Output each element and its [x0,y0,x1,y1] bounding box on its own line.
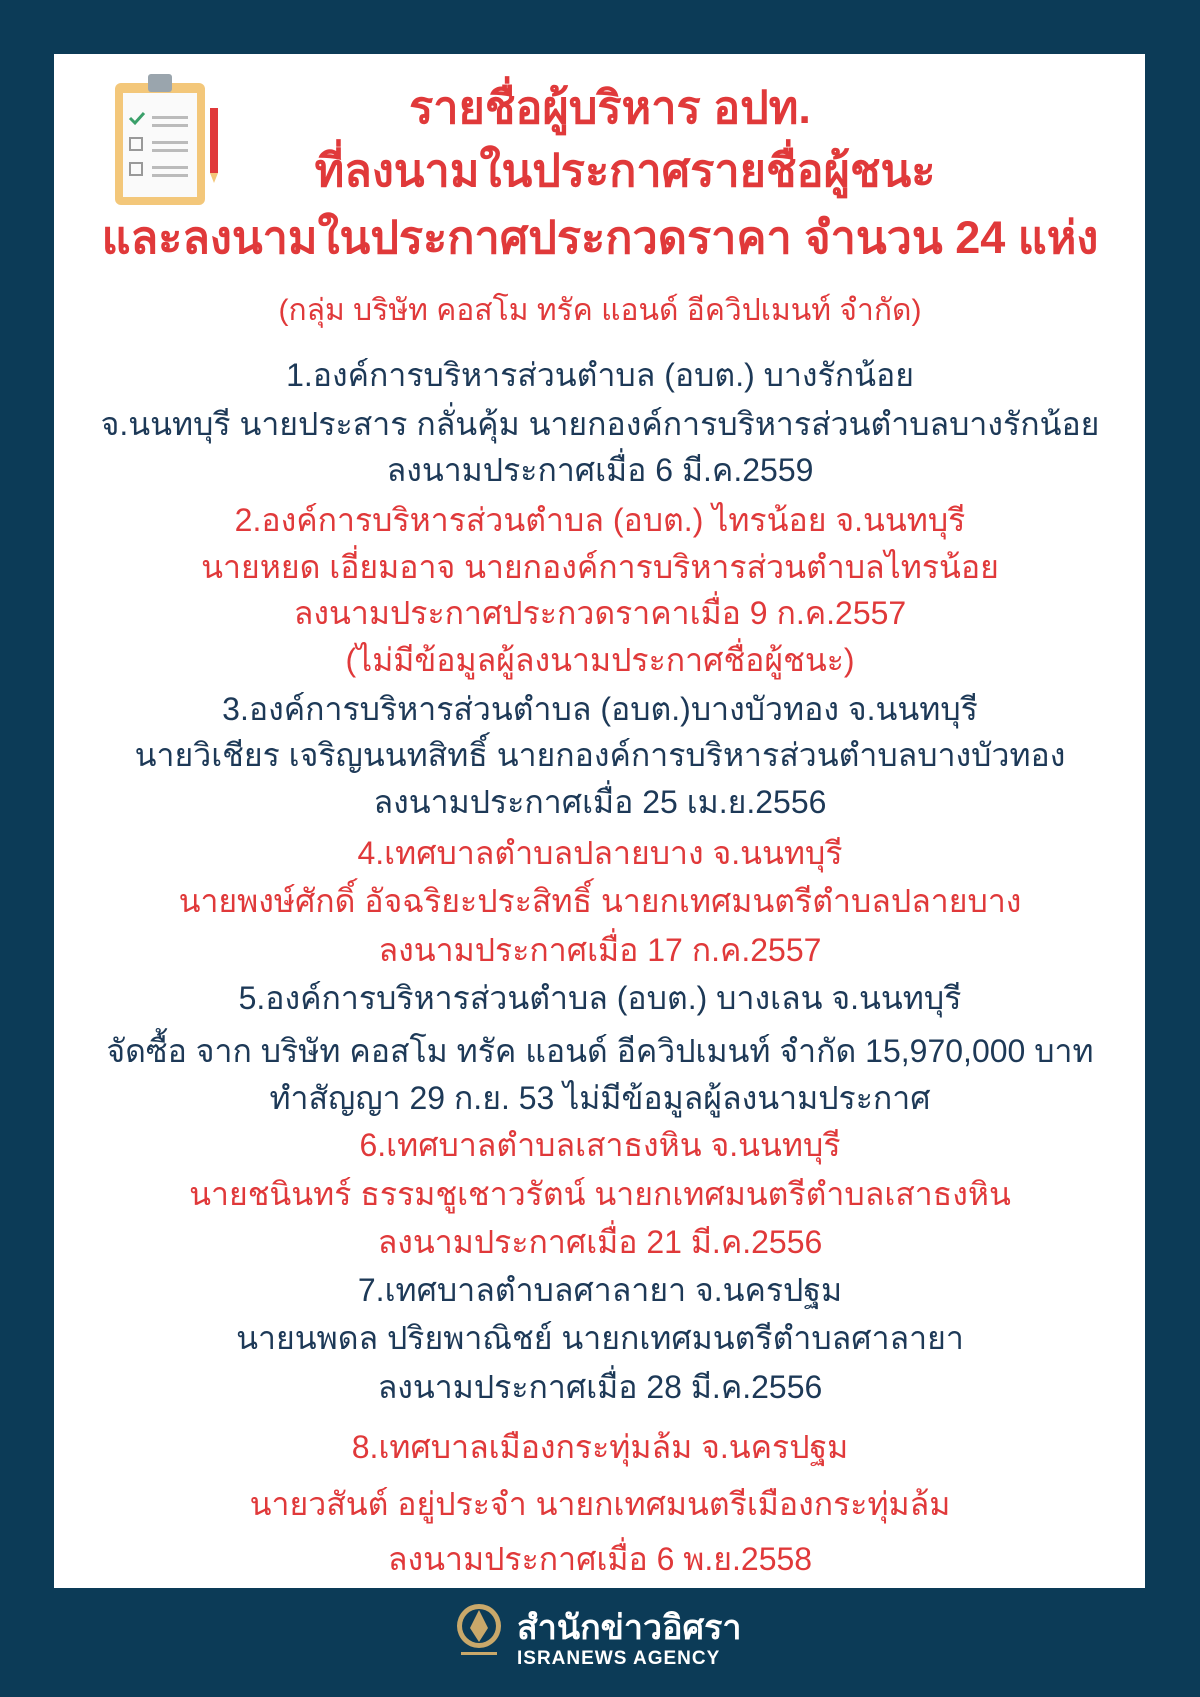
icon: clipboard [115,74,218,205]
list of entries: ทำสัญญา 29 ก.ย. 53 ไม่มีข้อมูลผู้ลงนามประกาศ [269,1080,931,1116]
list of entries: นายชนินทร์ ธรรมชูเชาวรัตน์ นายกเทศมนตรีตำบลเสาธงหิน [189,1176,1011,1212]
footer text: สำนักข่าวอิศรา [517,1609,741,1647]
list of entries [101,357,1099,1577]
list of entries: 4.เทศบาลตำบลปลายบาง จ.นนทบุรี [357,835,842,871]
list of entries: นายวสันต์ อยู่ประจำ นายกเทศมนตรีเมืองกระทุ่มล้ม [250,1486,950,1522]
list of entries: นายนพดล ปริยพาณิชย์ นายกเทศมนตรีตำบลศาลายา [236,1320,964,1356]
list of entries: ลงนามประกาศเมื่อ 21 มี.ค.2556 [378,1224,822,1260]
list of entries: ลงนามประกาศประกวดราคาเมื่อ 9 ก.ค.2557 [294,595,906,631]
list of entries: ลงนามประกาศเมื่อ 6 มี.ค.2559 [387,452,813,488]
list of entries: 5.องค์การบริหารส่วนตำบล (อบต.) บางเลน จ.นนทบุรี [239,980,961,1016]
footer logo [457,1604,741,1669]
list of entries: 8.เทศบาลเมืองกระทุ่มล้ม จ.นครปฐม [352,1429,848,1465]
list of entries: 2.องค์การบริหารส่วนตำบล (อบต.) ไทรน้อย จ.นนทบุรี [235,502,965,538]
title [102,76,1098,263]
list of entries: นายหยด เอี่ยมอาจ นายกองค์การบริหารส่วนตำบลไทรน้อย [201,549,999,585]
footer logo: ISRANEWS AGENCY [517,1648,720,1669]
list of entries: 7.เทศบาลตำบลศาลายา จ.นครปฐม [358,1272,842,1308]
list of entries: ลงนามประกาศเมื่อ 25 เม.ย.2556 [374,784,826,820]
list of entries: ลงนามประกาศเมื่อ 28 มี.ค.2556 [378,1369,822,1405]
icon: pen nib emblem [457,1604,501,1655]
list of entries: ลงนามประกาศเมื่อ 17 ก.ค.2557 [379,932,821,968]
list of entries: นายพงษ์ศักดิ์ อัจฉริยะประสิทธิ์ นายกเทศมนตรีตำบลปลายบาง [179,883,1021,919]
text: รายชื่อผู้บริหาร อปท. [409,82,811,133]
list of entries: นายวิเชียร เจริญนนทสิทธิ์ นายกองค์การบริหารส่วนตำบลบางบัวทอง [135,737,1065,773]
text: และลงนามในประกาศประกวดราคา จำนวน 24 แห่ง [102,212,1098,263]
list of entries: 3.องค์การบริหารส่วนตำบล (อบต.)บางบัวทอง จ.นนทบุรี [222,691,978,727]
text: ที่ลงนามในประกาศรายชื่อผู้ชนะ [315,145,935,196]
list of entries: (ไม่มีข้อมูลผู้ลงนามประกาศชื่อผู้ชนะ) [345,642,855,678]
list of entries: จ.นนทบุรี นายประสาร กลั่นคุ้ม นายกองค์การบริหารส่วนตำบลบางรักน้อย [101,406,1099,442]
list of entries: ลงนามประกาศเมื่อ 6 พ.ย.2558 [388,1541,812,1577]
list of entries: 1.องค์การบริหารส่วนตำบล (อบต.) บางรักน้อย [286,357,914,393]
list of entries: 6.เทศบาลตำบลเสาธงหิน จ.นนทบุรี [359,1127,841,1163]
subtitle: (กลุ่ม บริษัท คอสโม ทรัค แอนด์ อีควิปเมนท์ จำกัด) [279,294,921,327]
list of entries: จัดซื้อ จาก บริษัท คอสโม ทรัค แอนด์ อีควิปเมนท์ จำกัด 15,970,000 บาท [106,1033,1094,1069]
